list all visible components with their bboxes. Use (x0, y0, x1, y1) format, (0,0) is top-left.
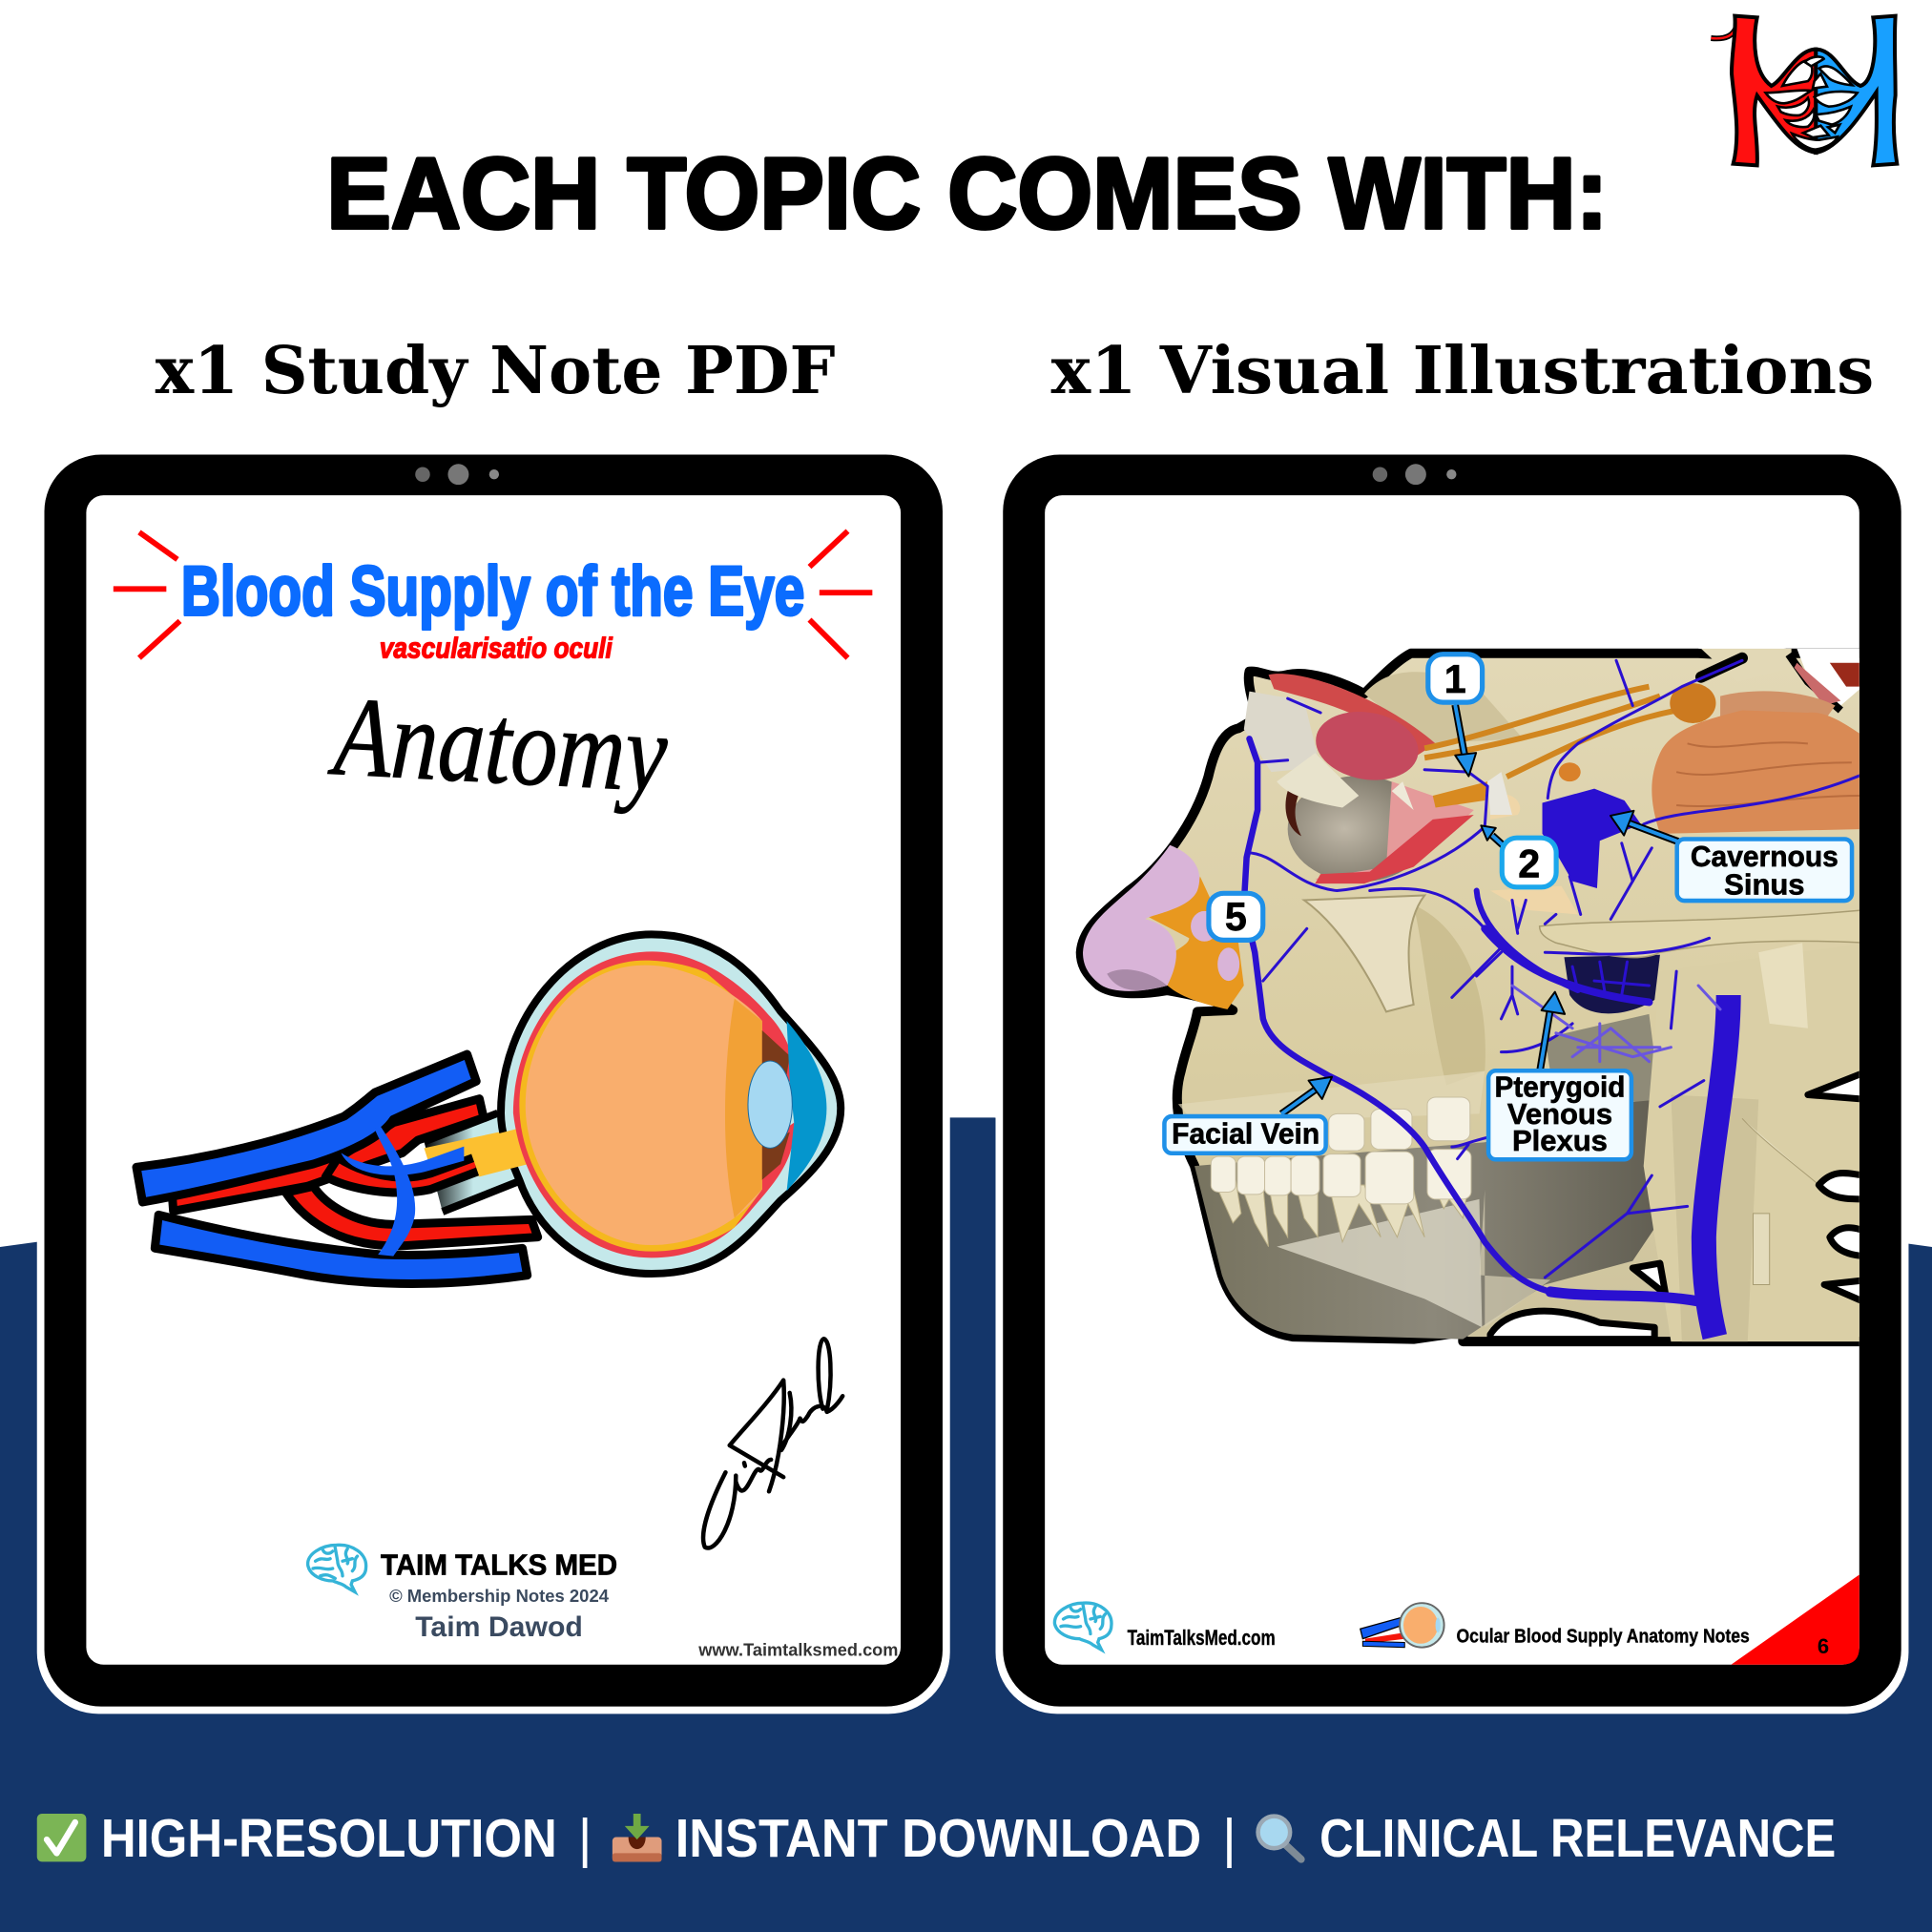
bottom feature strip: | (1222, 1809, 1236, 1869)
signature (703, 1339, 842, 1548)
page footer: 6 (1818, 1634, 1829, 1658)
nose (1148, 877, 1244, 1009)
arrow: to facial vein (1281, 1077, 1332, 1113)
bottom feature strip: | (578, 1809, 592, 1869)
skull anatomy illustration (1081, 649, 1868, 1341)
arrow: to label 2 (1481, 825, 1506, 848)
nerves (1424, 687, 1676, 777)
page corner (1731, 1574, 1859, 1665)
icon: mini eye (1361, 1603, 1444, 1648)
panel: right tablet (995, 447, 1908, 1714)
brand footer: Taim Dawod (415, 1611, 583, 1643)
icon: check (37, 1814, 86, 1861)
navy background (0, 1117, 1932, 1932)
brand footer: www.Taimtalksmed.com (697, 1641, 898, 1660)
logo: capillary bed (1711, 16, 1897, 165)
page footer (1054, 1574, 1859, 1665)
brand footer: © Membership Notes 2024 (389, 1586, 610, 1606)
icon: brain (308, 1545, 366, 1592)
label: pterygoid venous plexus: Plexus (1512, 1124, 1608, 1157)
label: 1 (1428, 654, 1483, 702)
eye illustration (136, 934, 841, 1283)
teeth (1214, 1180, 1468, 1247)
bottom feature strip (37, 1809, 1836, 1869)
label: facial vein: Facial Vein (1172, 1116, 1319, 1150)
label: pterygoid venous plexus: Pterygoid (1495, 1070, 1625, 1103)
label: pterygoid venous plexus: Venous (1507, 1097, 1612, 1131)
icon: download (613, 1814, 662, 1861)
label: 2 (1502, 838, 1556, 887)
label: 5: 5 (1225, 895, 1247, 939)
label: cavernous sinus: Sinus (1724, 868, 1805, 902)
label: pterygoid venous plexus (1488, 1070, 1631, 1159)
arrow: to pterygoid plexus (1540, 992, 1565, 1070)
label: 2: 2 (1518, 842, 1540, 886)
orbit (1288, 777, 1404, 882)
panel: left tablet (37, 447, 950, 1714)
label: 1: 1 (1444, 657, 1466, 701)
brand footer (308, 1545, 898, 1660)
title: EACH TOPIC COMES WITH: (326, 137, 1608, 250)
cover title with rays: Blood Supply of the Eye (181, 551, 804, 630)
arrow: to cavernous sinus (1610, 811, 1678, 841)
cover title with rays: vascularisatio oculi (380, 632, 613, 665)
handwritten subject: Anatomy (326, 673, 671, 816)
arrow: to label 1 (1455, 705, 1476, 777)
heading: study note: x1 Study Note PDF (156, 333, 836, 409)
label: cavernous sinus: Cavernous (1691, 840, 1839, 873)
cover title with rays (114, 531, 872, 665)
icon: magnifier (1258, 1817, 1301, 1859)
veins (1244, 660, 1868, 1337)
brand footer: TAIM TALKS MED (381, 1548, 617, 1581)
bottom feature strip: HIGH-RESOLUTION (101, 1809, 557, 1869)
page footer: Ocular Blood Supply Anatomy Notes (1456, 1626, 1750, 1648)
bottom feature strip: INSTANT DOWNLOAD (675, 1809, 1201, 1869)
label: cavernous sinus (1677, 839, 1852, 902)
bottom feature strip: CLINICAL RELEVANCE (1319, 1809, 1836, 1869)
label: 5 (1209, 893, 1263, 940)
heading: visual illustrations: x1 Visual Illustrations (1051, 333, 1874, 409)
icon: brain (1054, 1603, 1111, 1650)
page footer: TaimTalksMed.com (1128, 1626, 1276, 1650)
